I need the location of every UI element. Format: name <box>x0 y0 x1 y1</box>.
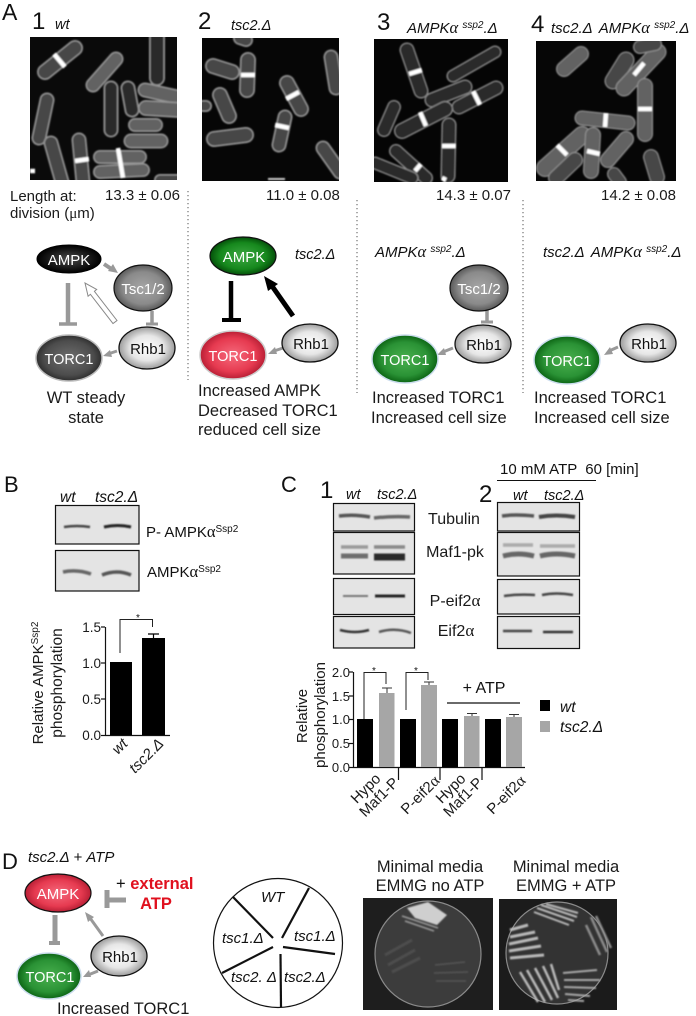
blot: P-eif2a +ATP <box>498 580 580 614</box>
node: AMPK: AMPK <box>37 886 79 903</box>
x separators <box>398 767 482 780</box>
gray tsc2 bars <box>379 685 522 767</box>
sector labels: WT <box>261 889 286 906</box>
significance bracket <box>120 613 152 653</box>
caption: WT steady state: WT steady <box>47 389 126 407</box>
node: TORC1: TORC1 <box>543 354 591 370</box>
tick labels: 2.0 <box>332 665 350 680</box>
tick labels: 1.5 <box>332 689 350 704</box>
x labels: Maf1-P <box>356 774 402 821</box>
tick labels <box>332 665 350 775</box>
blot lane labels B: wt <box>60 489 76 506</box>
arrow: Rhb1 to TORC1 <box>83 970 98 977</box>
strain label: .Δ <box>667 244 681 261</box>
heading: double mutant <box>531 11 689 38</box>
heading: AMPK alpha ssp2 deletion: AMPKα <box>407 18 458 37</box>
x labels: P-eif2α <box>484 772 530 818</box>
node: AMPK <box>210 237 276 275</box>
bar: tsc2 <box>142 634 165 735</box>
pathway: tsc2 deletion <box>200 237 338 379</box>
x labels: tsc2.Δ <box>126 735 167 777</box>
number 2 with lanes: 2 <box>479 481 492 508</box>
length value 4: 14.2 ± 0.08 <box>601 187 676 204</box>
node: Rhb1 <box>455 325 511 363</box>
number 1 with lanes <box>320 477 417 504</box>
node: Rhb1: Rhb1 <box>130 341 166 358</box>
caption: WT steady state: state <box>68 409 104 427</box>
blots column 1 <box>334 504 414 648</box>
number 1 with lanes: tsc2.Δ <box>377 487 417 503</box>
arrow: Rhb1 to TORC1 <box>103 350 117 357</box>
blot: Maf1-pk <box>334 532 414 574</box>
blot: Tubulin <box>334 504 414 531</box>
sector labels: tsc2. Δ <box>231 969 277 986</box>
x labels: wt <box>109 735 132 758</box>
blot row labels: Eif2α <box>438 621 474 640</box>
caption: increased TORC1: Increased cell size <box>371 409 507 427</box>
sector labels <box>222 889 336 986</box>
plate heading: plus ATP: EMMG + ATP <box>516 877 616 895</box>
strain label: ssp2 <box>430 244 452 255</box>
arrow: AMPK to Tsc1/2 <box>104 264 118 273</box>
heading: double mutant: ssp2 <box>654 20 676 31</box>
node: TORC1: TORC1 <box>209 349 257 365</box>
length value 3: 14.3 ± 0.07 <box>436 187 511 204</box>
micrograph 4: double mutant cells <box>536 41 676 182</box>
x labels <box>109 735 167 777</box>
y axis label C line 2: phosphorylation <box>312 662 329 768</box>
arrow: Rhb1 to AMPK <box>264 276 293 316</box>
number 1 with lanes: 1 <box>320 477 333 504</box>
tick labels: 1.5 <box>82 620 101 635</box>
y axis label C: Relative <box>294 689 311 743</box>
caption: increased TORC1: Increased TORC1 <box>372 389 504 407</box>
length value 2: 11.0 ± 0.08 <box>266 187 340 204</box>
pathway: plus external ATP <box>17 874 147 999</box>
length value 1: 13.3 ± 0.06 <box>105 187 180 204</box>
arrow: Rhb1 to AMPK <box>85 912 103 936</box>
panel B label: B <box>4 472 19 497</box>
black wt bars <box>357 719 501 767</box>
plus ATP bracket <box>447 680 520 703</box>
node: AMPK: AMPK <box>223 249 265 266</box>
node: Rhb1 <box>282 324 338 362</box>
inhibition: AMPK to TORC1 <box>222 281 241 320</box>
plate photo: plus ATP <box>499 899 617 1010</box>
node: Rhb1: Rhb1 <box>102 949 138 966</box>
plate heading: no ATP: EMMG no ATP <box>376 877 484 895</box>
y axis label B: Relative AMPK <box>30 644 47 744</box>
node: TORC1: TORC1 <box>381 353 429 369</box>
heading: tsc2 deletion <box>198 8 271 35</box>
x labels: Hypo <box>433 770 469 807</box>
x labels: Maf1-P <box>440 774 486 821</box>
number 2 with lanes: wt <box>513 488 528 504</box>
tick labels: 1.0 <box>82 656 101 671</box>
caption: increased AMPK: reduced cell size <box>198 421 321 439</box>
node: Tsc1/2 <box>450 265 508 311</box>
x labels: Hypo <box>348 770 384 807</box>
blot label: P-AMPK: P- AMPKα <box>146 522 216 541</box>
sector labels: tsc1.Δ <box>222 930 264 947</box>
node: Rhb1: Rhb1 <box>293 336 329 353</box>
blot lane labels B: tsc2.Δ <box>95 489 138 506</box>
blot: total AMPK <box>56 550 139 591</box>
pathway: WT steady state <box>36 245 175 381</box>
blot: Eif2a <box>334 616 414 648</box>
blots column 2 <box>498 502 580 648</box>
arrow: Rhb1 to TORC1 <box>437 348 453 355</box>
tick labels: 1.0 <box>332 712 350 727</box>
tick labels: 0.5 <box>332 736 350 751</box>
significance stars: * <box>414 666 418 677</box>
strain label: AMPKα <box>375 242 426 261</box>
node: AMPK: AMPK <box>48 252 90 269</box>
caption: increased TORC1 double mutant: Increased TORC1 <box>534 389 666 407</box>
heading: AMPK alpha ssp2 deletion: 3 <box>377 9 390 36</box>
tick labels: 0.0 <box>82 728 101 743</box>
legend: tsc2.Δ <box>560 719 603 736</box>
plate heading: plus ATP: Minimal media <box>513 858 620 876</box>
pathway: double mutant <box>534 242 681 384</box>
x labels: P-eif2α <box>398 772 444 818</box>
bar chart: relative phosphorylation <box>332 665 530 821</box>
micrograph 1: wt cells <box>30 37 180 182</box>
heading: double mutant: 4 <box>531 11 544 38</box>
number 2 with lanes <box>479 481 584 508</box>
arrow: Rhb1 to TORC1 <box>268 347 283 354</box>
heading: wt: 1 <box>32 8 45 35</box>
legend: wt <box>560 699 576 716</box>
heading: AMPK alpha ssp2 deletion: .Δ <box>483 20 498 37</box>
callout: plus external ATP: external <box>130 875 194 893</box>
blot label: P-AMPK: Ssp2 <box>216 524 239 535</box>
bar: wt <box>110 662 132 735</box>
legend <box>540 699 603 736</box>
heading: double mutant: .Δ <box>675 20 689 37</box>
arrow: Rhb1 to TORC1 <box>604 347 618 355</box>
caption: increased AMPK: Increased AMPK <box>198 382 321 400</box>
blot: Tubulin +ATP <box>498 502 580 531</box>
sector labels: tsc2.Δ <box>284 969 326 986</box>
number 2 with lanes: tsc2.Δ <box>544 488 584 504</box>
callout: plus external ATP: ATP <box>140 895 172 913</box>
hollow arrow: Rhb1 to AMPK <box>85 283 117 324</box>
pathway: AMPK deletion <box>372 242 511 383</box>
node: TORC1 <box>372 335 438 383</box>
tick labels <box>82 620 101 743</box>
node: TORC1 <box>200 331 266 379</box>
node: Rhb1 <box>620 324 676 362</box>
strain label: tsc2.Δ AMPKα <box>543 242 642 261</box>
length at division label: Length at: <box>10 188 77 205</box>
heading: wt: wt <box>55 17 70 33</box>
blot row labels: Tubulin <box>428 511 480 528</box>
strain label: .Δ <box>451 244 466 261</box>
significance brackets <box>364 672 428 719</box>
micrograph 3: AMPK deletion cells <box>374 39 508 182</box>
significance stars <box>372 666 418 677</box>
length at division label: division (μm) <box>10 205 95 222</box>
x labels <box>348 770 530 821</box>
node: Rhb1: Rhb1 <box>631 336 667 353</box>
caption: increased TORC1 double mutant: Increased cell size <box>534 409 670 427</box>
number 1 with lanes: wt <box>346 487 360 503</box>
heading: tsc2 deletion: tsc2.Δ <box>231 18 271 34</box>
blot: P-eif2a <box>334 578 414 614</box>
inhibition: AMPK to TORC1 <box>59 283 77 324</box>
plate heading: no ATP: Minimal media <box>377 858 484 876</box>
caption: increased AMPK: Decreased TORC1 <box>198 402 338 420</box>
node: TORC1: TORC1 <box>45 352 93 368</box>
heading: AMPK alpha ssp2 deletion: ssp2 <box>462 20 484 31</box>
blot: Maf1-pk +ATP <box>498 532 580 576</box>
blot row labels: Maf1-pk <box>426 544 485 561</box>
blot label: AMPK: Ssp2 <box>198 564 221 575</box>
inhibition: ATP to AMPK <box>107 890 126 908</box>
plate map <box>214 878 342 1008</box>
inhibition: Tsc1/2 to Rhb1 <box>146 311 158 324</box>
significance bracket: * <box>136 613 140 624</box>
heading: tsc2 deletion: 2 <box>198 8 211 35</box>
panel C label: C <box>281 472 297 497</box>
bar chart: relative AMPK phosphorylation <box>82 613 170 777</box>
plus ATP bracket: + ATP <box>463 680 505 697</box>
inhibition: Tsc1/2 to Rhb1 <box>481 310 493 322</box>
significance stars: * <box>372 666 376 677</box>
strain label: ssp2 <box>646 244 668 255</box>
node: Rhb1: Rhb1 <box>466 337 502 354</box>
error bars <box>382 682 519 717</box>
ATP treatment header: 10 mM ATP 60 [min] <box>500 461 639 478</box>
plate photo: no ATP <box>363 898 493 1010</box>
y axis label B: Ssp2 <box>30 621 41 644</box>
heading: wt <box>32 8 70 35</box>
micrograph 2: tsc2 cells <box>202 38 340 181</box>
tick labels: 0.5 <box>82 692 101 707</box>
node: TORC1: TORC1 <box>26 970 74 986</box>
inhibition: AMPK to TORC1 <box>49 915 60 943</box>
node: Tsc1/2: Tsc1/2 <box>457 281 501 298</box>
blot label: AMPK: AMPKα <box>147 562 198 581</box>
blot: P-AMPK <box>56 506 139 544</box>
blot row labels: P-eif2α <box>430 591 480 610</box>
callout: plus external ATP: + <box>116 875 130 893</box>
sector labels: tsc1.Δ <box>294 928 336 945</box>
tick labels: 0.0 <box>332 760 350 775</box>
node: TORC1 <box>534 336 600 384</box>
y axis label B line 2: phosphorylation <box>49 628 66 738</box>
blot: Eif2a +ATP <box>498 616 580 648</box>
heading: double mutant: tsc2.Δ AMPKα <box>551 18 650 37</box>
blot row labels <box>426 511 485 640</box>
panel D label: D <box>2 849 18 874</box>
heading: AMPK alpha ssp2 deletion <box>377 9 498 37</box>
strain label: tsc2 deletion: tsc2.Δ <box>295 247 335 263</box>
strain label D: tsc2.Δ + ATP <box>28 849 114 866</box>
node: Tsc1/2: Tsc1/2 <box>121 281 165 298</box>
